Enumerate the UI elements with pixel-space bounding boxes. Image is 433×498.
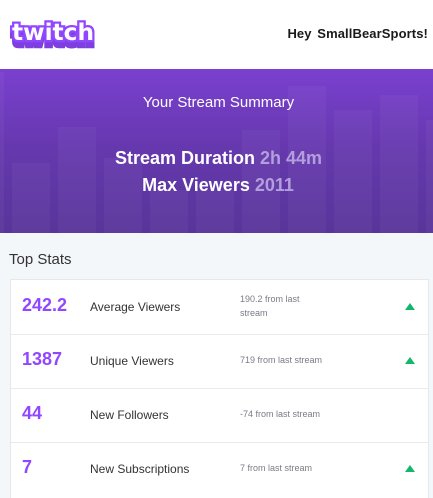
logo: twitch wordmark: twitch bbox=[12, 20, 94, 46]
stream duration: Stream Duration 2h 44m bbox=[115, 148, 322, 168]
panel: top stats table bbox=[10, 279, 429, 498]
greeting: Hey SmallBearSports! bbox=[287, 26, 428, 41]
row: unique viewers bbox=[22, 349, 415, 369]
row: average viewers: stream bbox=[240, 308, 268, 318]
row: new followers: New Followers bbox=[90, 408, 169, 422]
header bbox=[0, 0, 433, 69]
row: new subscriptions: New Subscriptions bbox=[90, 462, 189, 476]
row: new followers: 44 bbox=[22, 403, 42, 423]
row: average viewers bbox=[22, 294, 415, 318]
row: average viewers: 242.2 bbox=[22, 295, 67, 315]
row: new subscriptions: 7 bbox=[22, 457, 32, 477]
row: new subscriptions bbox=[22, 457, 415, 477]
row: unique viewers: 719 from last stream bbox=[240, 355, 322, 365]
banner title: Your Stream Summary bbox=[143, 94, 294, 111]
row: new subscriptions: 7 from last stream bbox=[240, 463, 312, 473]
banner: stream summary bbox=[0, 69, 433, 233]
row: unique viewers: 1387 bbox=[22, 349, 62, 369]
row: unique viewers: Unique Viewers bbox=[90, 354, 174, 368]
max viewers: Max Viewers 2011 bbox=[142, 175, 294, 195]
logo: twitch wordmark: twitch bbox=[12, 20, 94, 46]
row: average viewers: Average Viewers bbox=[90, 300, 180, 314]
row: new followers bbox=[22, 403, 320, 423]
logo: twitch wordmark: twitch bbox=[12, 26, 94, 52]
row: new followers: -74 from last stream bbox=[240, 409, 320, 419]
background bar chart bbox=[0, 69, 433, 233]
row: average viewers: 190.2 from last bbox=[240, 294, 300, 304]
heading: top stats: Top Stats bbox=[9, 251, 72, 268]
